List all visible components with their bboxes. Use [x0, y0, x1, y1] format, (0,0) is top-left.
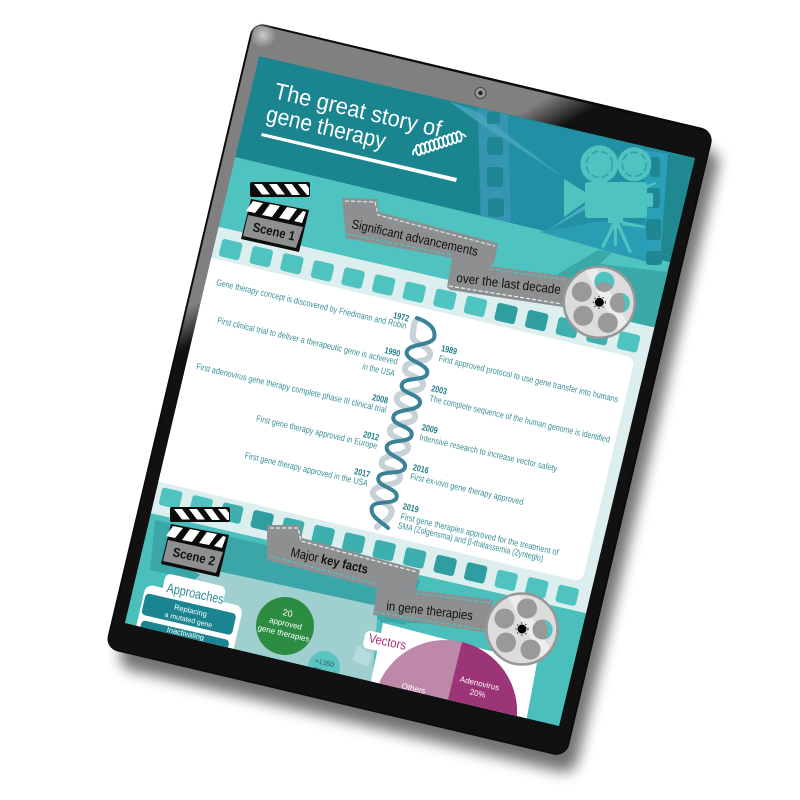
timeline events left: First gene therapy approved in the USA: [244, 450, 369, 488]
timeline events left: 2017: [353, 466, 371, 480]
button: replacing a mutated gene: [141, 593, 237, 635]
icon: film projector: [564, 145, 656, 253]
banner: significant advancements: over the last decade: [456, 270, 562, 297]
screen: [125, 56, 695, 726]
timeline events left: [195, 277, 410, 488]
darker panel behind reel: [556, 250, 668, 328]
timeline events right: Intensive research to increase vector safety: [419, 432, 559, 474]
timeline events right: SMA (Zolgensma) and β-thalassemia (Zynteglo): [397, 520, 544, 563]
title underline: [261, 133, 457, 182]
timeline events left: in the USA: [362, 361, 396, 378]
tablet frame: [105, 22, 714, 757]
stat: clinical trials: Clinical: [312, 667, 336, 679]
timeline events left: 1990: [384, 345, 401, 359]
header background: [235, 56, 696, 262]
chart: vector pie: 20%: [469, 687, 486, 700]
timeline events right: 1989: [440, 343, 458, 357]
title: The great story of: [272, 78, 445, 142]
icon: DNA coil: [413, 131, 466, 156]
chart: vector pie: Adenovirus: [459, 675, 500, 692]
chart: DNA helix timeline: [372, 318, 434, 528]
timeline events right: First ex-vivo gene therapy approved: [409, 471, 525, 507]
button: replacing a mutated gene: Replacing: [173, 602, 208, 619]
icon: clapperboard scene 1: [241, 182, 310, 252]
stat: clinical trials: >1350: [314, 658, 335, 669]
stat: approved therapies: gene therapies: [257, 623, 310, 644]
chart: vector pie: Others: [401, 681, 426, 696]
timeline events left: First adenovirus gene therapy complete phase III clinical trial: [195, 361, 388, 415]
film strip 1 holes: [218, 238, 641, 353]
label: scene 2: Scene 2: [171, 544, 217, 569]
tab: approaches: Approaches: [165, 580, 225, 607]
timeline events left: 2012: [362, 429, 380, 443]
timeline events left: Gene therapy concept is discovered by Friedmann and Robin: [215, 277, 408, 331]
camera: [475, 88, 486, 98]
stat: approved therapies: [256, 597, 314, 655]
chart: vector pie: [379, 640, 517, 716]
tab: vectors: [363, 630, 406, 651]
banner: major key facts: in gene therapies: [386, 598, 474, 623]
timeline events right: First gene therapies approved for the treatment of: [400, 511, 560, 557]
banner: significant advancements: Significant advancements: [350, 216, 480, 259]
icon: film reel 1: [564, 267, 635, 338]
button: inactivating: Inactivating: [166, 625, 205, 642]
timeline events left: 1972: [392, 310, 410, 324]
tab: vectors: Vectors: [367, 630, 408, 653]
timeline events right: First approved protocol to use gene transfer into humans: [438, 353, 620, 404]
icon: clapperboard scene 2: [161, 507, 230, 577]
title: gene therapy: [264, 101, 389, 154]
timeline events right: 2009: [421, 422, 439, 436]
banner: major key facts: Major key facts: [289, 544, 370, 577]
timeline events left: 2008: [371, 392, 389, 406]
icon: film reel 2: [486, 594, 558, 664]
timeline events right: [397, 343, 620, 563]
timeline events right: 2003: [430, 383, 448, 397]
stat: approved therapies: approved: [268, 615, 303, 632]
film strip band and panel backing: [150, 226, 654, 617]
stat: clinical trials: [308, 651, 340, 674]
panel: approaches: [136, 574, 242, 649]
panel: vectors: [363, 623, 537, 718]
timeline events right: 2016: [412, 462, 430, 476]
tablet shadow: [117, 44, 721, 775]
timeline events left: First clinical trial to deliver a therapeutic gene is achieved: [216, 315, 399, 367]
timeline events right: 2019: [402, 501, 420, 515]
film strip holes in header: [487, 112, 662, 265]
timeline events left: First gene therapy approved in Europe: [255, 413, 378, 451]
banner: significant advancements: [342, 198, 570, 307]
scene 2 background: [120, 513, 620, 730]
film strip 2 holes: [158, 487, 579, 606]
label: scene 1: Scene 1: [251, 219, 297, 244]
panel: timeline: [158, 258, 634, 580]
stat: approved therapies: 20: [282, 607, 294, 619]
banner: major key facts: [267, 525, 493, 633]
button: replacing a mutated gene: a mutated gene: [164, 612, 213, 629]
timeline events right: The complete sequence of the human genome is identified: [429, 393, 611, 445]
